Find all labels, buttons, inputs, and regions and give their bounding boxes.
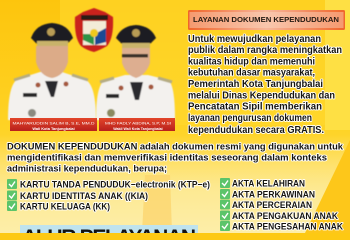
intro paragraph: layanan pengurusan dokumen bbox=[188, 113, 312, 124]
person: left official bbox=[8, 23, 96, 120]
item: kelahiran: AKTA KELAHIRAN bbox=[232, 178, 305, 188]
item: pengakuan anak: AKTA PENGAKUAN ANAK bbox=[232, 211, 338, 221]
intro paragraph: melalui Dinas Kependudukan dan bbox=[188, 90, 335, 102]
title banner bbox=[188, 10, 345, 30]
definition paragraph: mengidentifikasi dan memverifikasi identitas seseorang dalam konteks bbox=[7, 152, 327, 162]
title banner: LAYANAN DOKUMEN KEPENDUDUKAN bbox=[193, 15, 339, 24]
emblem bbox=[75, 8, 113, 52]
item: KIA: KARTU IDENTITAS ANAK ((KIA) bbox=[20, 191, 148, 201]
item: pengesahan anak: AKTA PENGESAHAN ANAK bbox=[232, 222, 343, 232]
definition paragraph bbox=[7, 142, 344, 174]
list: kartu bbox=[7, 179, 210, 212]
name plate: right: MHD FADLY ABDINA, S.P, M.SI bbox=[105, 122, 171, 126]
intro paragraph bbox=[188, 34, 342, 136]
item: KTP-e: KARTU TANDA PENDUDUK−electronik (KTP−e) bbox=[20, 180, 210, 190]
definition paragraph: DOKUMEN KEPENDUDUKAN adalah dokumen resmi yang digunakan untuk bbox=[7, 142, 344, 152]
intro paragraph: publik dalam rangka meningkatkan bbox=[188, 45, 342, 56]
name plate: left: MAHYARUDDIN SALIM B, S.E, MM.D bbox=[12, 120, 95, 126]
name plate: right: Wakil Wali Kota Tanjungbalai bbox=[113, 127, 163, 131]
intro paragraph: Untuk mewujudkan pelayanan bbox=[188, 34, 321, 45]
item: perceraian: AKTA PERCERAIAN bbox=[232, 200, 312, 210]
name plate: right bbox=[99, 118, 175, 131]
name plate: left: Wali Kota Tanjungbalai bbox=[32, 126, 75, 131]
definition paragraph: administrasi kependudukan, berupa; bbox=[7, 164, 167, 174]
intro paragraph: kebutuhan dasar masyarakat, bbox=[188, 68, 315, 78]
intro paragraph: Pemerintah Kota Tanjungbalai bbox=[188, 79, 323, 90]
heading: alur pelayanan bbox=[20, 225, 198, 240]
item: perkawinan: AKTA PERKAWINAN bbox=[232, 190, 315, 200]
name plate: left bbox=[10, 118, 97, 131]
item: KK: KARTU KELUAGA (KK) bbox=[20, 202, 110, 212]
person: right official bbox=[96, 25, 175, 120]
intro paragraph: kualitas hidup dan memenuhi bbox=[188, 56, 315, 68]
list: akta bbox=[220, 178, 343, 232]
intro paragraph: Pencatatan Sipil memberikan bbox=[188, 102, 322, 112]
intro paragraph: kependudukan secara GRATIS. bbox=[188, 125, 324, 136]
